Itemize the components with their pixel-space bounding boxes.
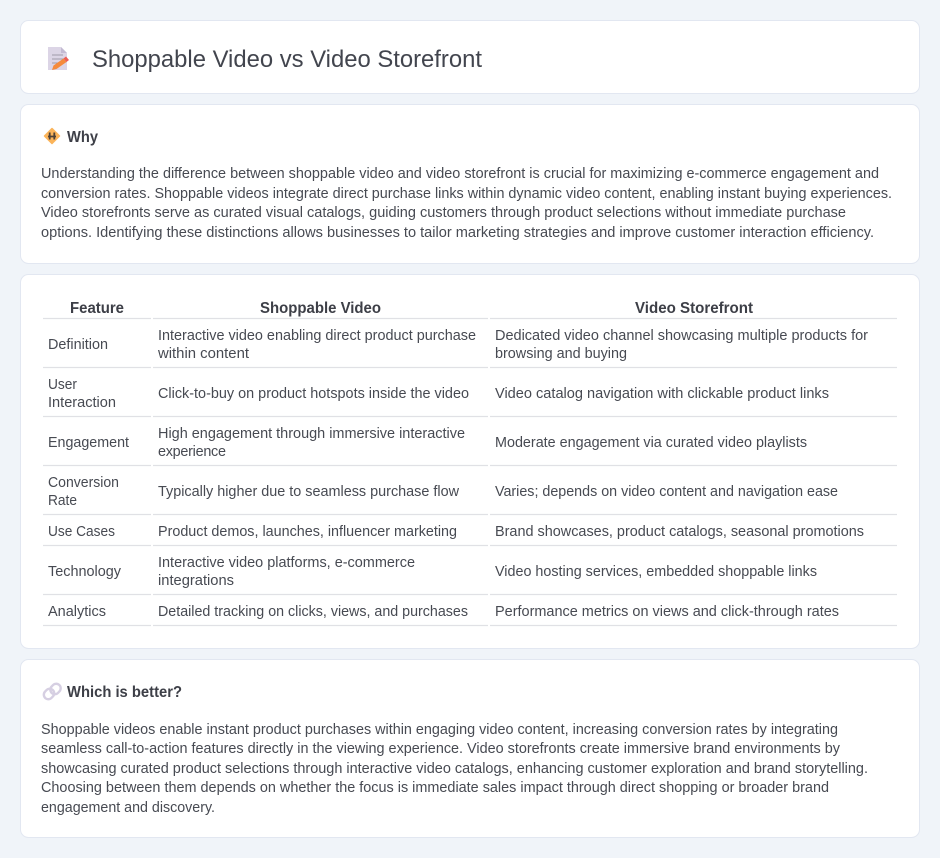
icon: memo with pencil bbox=[48, 47, 69, 70]
text block: why paragraph bbox=[41, 166, 892, 241]
table header row bbox=[70, 300, 754, 317]
row: use cases: Brand showcases, product catalogs, seasonal promotions bbox=[495, 524, 864, 540]
text block: which is better paragraph: Shoppable videos enable instant product purchases within engaging video content, increasing conversion rates by integrating bbox=[41, 722, 838, 738]
row: user interaction: User bbox=[48, 377, 77, 393]
row: technology bbox=[48, 555, 817, 589]
row: technology: Technology bbox=[48, 564, 122, 580]
text block: why paragraph: Understanding the difference between shoppable video and video storefront is crucial for maximizing e-commerce engagement and bbox=[41, 166, 879, 182]
row: technology: Interactive video platforms, e-commerce bbox=[158, 555, 415, 571]
row: engagement: Moderate engagement via curated video playlists bbox=[495, 435, 807, 451]
row: user interaction bbox=[48, 377, 829, 411]
row: definition: Dedicated video channel showcasing multiple products for bbox=[495, 328, 868, 344]
row: use cases bbox=[48, 524, 864, 540]
row: analytics: Performance metrics on views and click-through rates bbox=[495, 604, 839, 620]
panel: which is better bbox=[20, 660, 920, 838]
row: technology: integrations bbox=[158, 573, 234, 589]
row: use cases: Product demos, launches, influencer marketing bbox=[158, 524, 457, 540]
panel: why bbox=[20, 104, 920, 264]
text block: which is better paragraph: seamless call-to-action features directly in the viewing experience. Video storefronts create immersive brand environments by bbox=[41, 741, 841, 757]
row: engagement: High engagement through immersive interactive bbox=[158, 426, 465, 442]
text block: which is better paragraph: engagement and discovery. bbox=[41, 800, 215, 816]
row: analytics: Analytics bbox=[48, 604, 106, 620]
row: definition: Definition bbox=[48, 337, 108, 353]
row: analytics: Detailed tracking on clicks, views, and purchases bbox=[158, 604, 468, 620]
row: conversion rate: Typically higher due to seamless purchase flow bbox=[158, 484, 460, 500]
text block: which is better paragraph bbox=[41, 722, 868, 816]
table header row: Video Storefront bbox=[635, 300, 754, 317]
row: conversion rate: Rate bbox=[48, 493, 77, 509]
panel: comparison table bbox=[20, 274, 920, 648]
icon: chain link bbox=[42, 682, 63, 701]
row: conversion rate: Varies; depends on video content and navigation ease bbox=[495, 484, 838, 500]
row: user interaction: Video catalog navigation with clickable product links bbox=[495, 386, 829, 402]
row: conversion rate bbox=[48, 475, 838, 509]
row: definition bbox=[48, 328, 868, 362]
heading: why: Why bbox=[67, 129, 98, 146]
text block: which is better paragraph: Choosing between them depends on whether the focus is immediate sales impact through direct shopping or broader brand bbox=[41, 780, 829, 796]
text block: why paragraph: options. Identifying these distinctions allows businesses to tailor marketing strategies and improve customer interaction efficiency. bbox=[41, 225, 874, 241]
row: engagement: experience bbox=[158, 444, 226, 460]
table header row: Shoppable Video bbox=[260, 300, 381, 317]
row: conversion rate: Conversion bbox=[48, 475, 119, 491]
table header row: Feature bbox=[70, 300, 124, 317]
panel: header bbox=[20, 20, 920, 94]
row: user interaction: Interaction bbox=[48, 395, 116, 411]
row: definition: browsing and buying bbox=[495, 346, 627, 362]
row: analytics bbox=[48, 604, 839, 620]
title: Shoppable Video vs Video Storefront bbox=[92, 46, 482, 73]
row: technology: Video hosting services, embedded shoppable links bbox=[495, 564, 817, 580]
row: definition: within content bbox=[157, 346, 249, 362]
text block: which is better paragraph: showcasing curated product selections through interactive video catalogs, enhancing customer exploration and brand storytelling. bbox=[41, 761, 868, 777]
icon: orange diamond sign bbox=[44, 128, 60, 144]
row: definition: Interactive video enabling direct product purchase bbox=[158, 328, 476, 344]
row: user interaction: Click-to-buy on product hotspots inside the video bbox=[158, 386, 469, 402]
text block: why paragraph: conversion rates. Shoppable videos integrate direct purchase links within dynamic video content, enabling instant buying experiences. bbox=[41, 186, 892, 202]
heading: which is better: Which is better? bbox=[67, 684, 182, 701]
row: engagement bbox=[48, 426, 807, 460]
row: engagement: Engagement bbox=[48, 435, 129, 451]
row: use cases: Use Cases bbox=[48, 524, 115, 540]
text block: why paragraph: Video storefronts serve as curated visual catalogs, guiding customers through product selections without immediate purchase bbox=[41, 205, 846, 221]
